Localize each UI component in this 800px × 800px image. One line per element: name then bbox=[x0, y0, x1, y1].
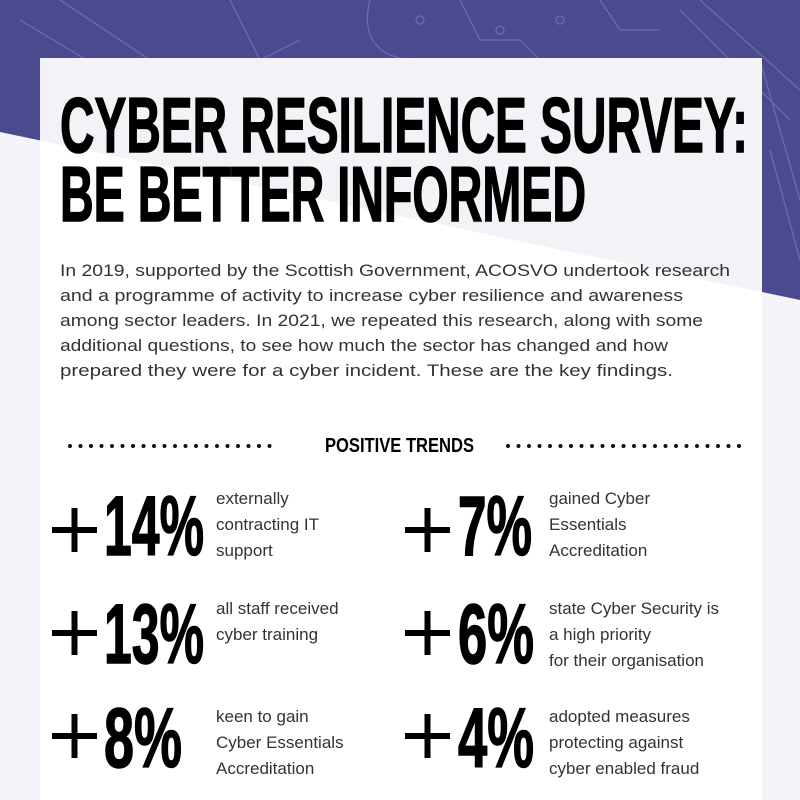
stat: +8%: keen to gain bbox=[216, 707, 309, 726]
title bbox=[60, 81, 748, 238]
intro paragraph: additional questions, to see how much the sector has changed and how bbox=[60, 336, 669, 355]
stat: +13%: all staff received bbox=[216, 599, 339, 618]
stat: +6%: 6% bbox=[458, 587, 534, 681]
stat: +13%: 13% bbox=[104, 587, 204, 681]
stat: +7%: 7% bbox=[458, 479, 532, 573]
intro paragraph bbox=[60, 261, 730, 380]
intro paragraph: among sector leaders. In 2021, we repeated this research, along with some bbox=[60, 311, 703, 330]
intro paragraph: In 2019, supported by the Scottish Government, ACOSVO undertook research bbox=[60, 261, 730, 280]
section heading: positive trends: POSITIVE TRENDS bbox=[325, 435, 474, 457]
stat: +7%: gained Cyber bbox=[549, 489, 650, 508]
stat: +4%: cyber enabled fraud bbox=[549, 759, 699, 778]
stat: +14%: support bbox=[216, 541, 273, 560]
stat: +8%: Accreditation bbox=[216, 759, 314, 778]
stat: +6%: a high priority bbox=[549, 625, 652, 644]
stat: +14% bbox=[52, 479, 319, 573]
stat: +13% bbox=[52, 587, 339, 681]
stat: +7%: Essentials bbox=[549, 515, 626, 534]
stat: +6%: for their organisation bbox=[549, 651, 704, 670]
stat: +7% bbox=[405, 479, 650, 573]
stat: +4% bbox=[405, 691, 699, 785]
stat: +8% bbox=[52, 691, 344, 785]
stat: +4%: adopted measures bbox=[549, 707, 690, 726]
stat: +14%: 14% bbox=[104, 479, 204, 573]
stat: +6%: state Cyber Security is bbox=[549, 599, 719, 618]
intro paragraph: and a programme of activity to increase cyber resilience and awareness bbox=[60, 286, 683, 305]
intro paragraph: prepared they were for a cyber incident. These are the key findings. bbox=[60, 361, 673, 380]
stat: +4%: 4% bbox=[458, 691, 534, 785]
stat: +8%: 8% bbox=[104, 691, 182, 785]
stat: +14%: contracting IT bbox=[216, 515, 319, 534]
stat: +13%: cyber training bbox=[216, 625, 318, 644]
stat: +6% bbox=[405, 587, 719, 681]
stat: +4%: protecting against bbox=[549, 733, 683, 752]
stat: +8%: Cyber Essentials bbox=[216, 733, 344, 752]
stat: +14%: externally bbox=[216, 489, 289, 508]
stat: +7%: Accreditation bbox=[549, 541, 647, 560]
